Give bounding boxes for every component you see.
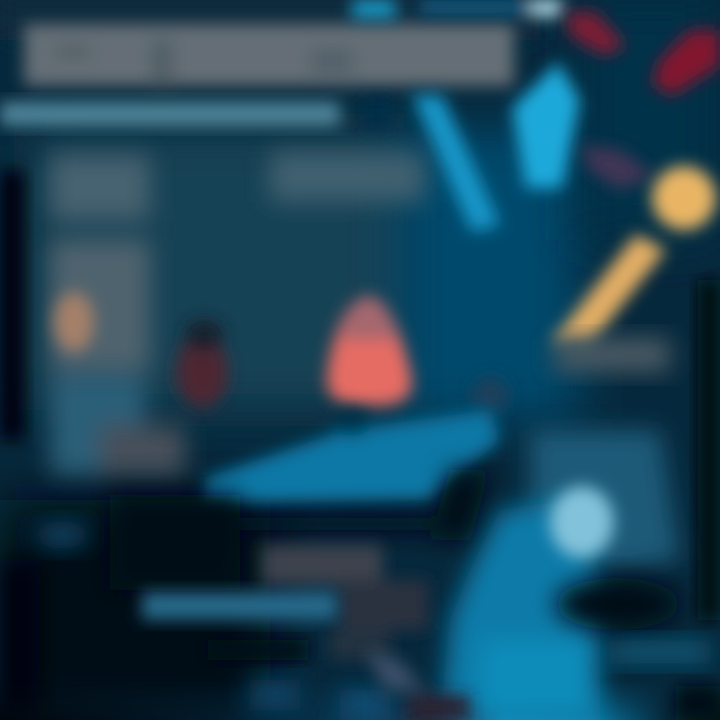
left text column [50,155,185,475]
small blue marks bottom [250,680,390,720]
maroon bottom accent [365,650,470,720]
grey text block right [555,338,670,372]
dark red figure [176,319,228,408]
main blue flow [440,500,600,720]
gold circle [652,166,716,230]
upper middle text block [270,152,425,202]
subtitle bar [0,102,340,126]
red ribbons top right [566,12,720,190]
small dark node [472,377,508,413]
dark oval lower right [556,578,680,630]
dark strip lower [208,640,308,660]
lower blue bar [142,592,337,620]
right blue flow panel [530,430,680,570]
dark corner bottom right [676,686,720,720]
coral drop shape [327,296,412,406]
blue strip lower right [610,640,710,664]
grey lower text block [262,545,428,660]
light blue diagonal beams [352,0,580,232]
dark square near subtitle [364,98,390,128]
dark zone below panel [110,470,490,590]
pale blue glowing circle [550,486,614,558]
title banner [24,24,514,90]
central blue panel [205,408,500,505]
orange accent left [54,292,94,352]
blue small accent left [34,521,90,549]
gold diagonal bar [552,234,666,345]
